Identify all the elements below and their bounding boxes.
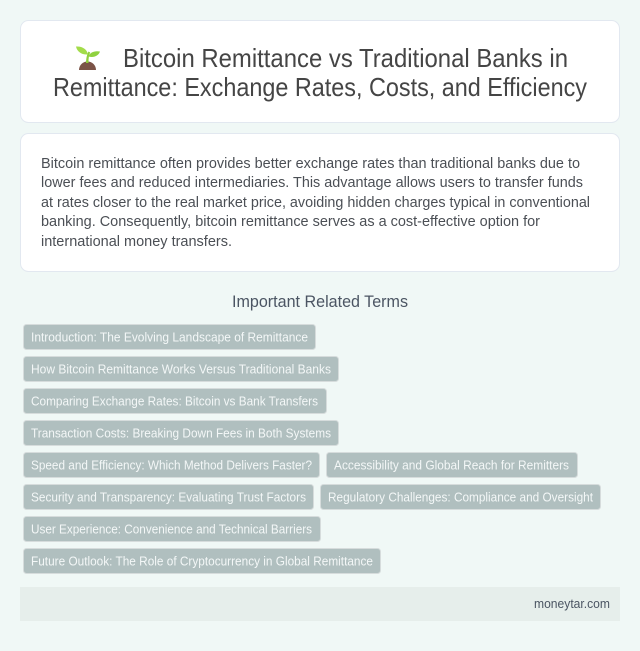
panel: summary text xyxy=(20,134,620,272)
tag: future outlook xyxy=(24,548,380,574)
tag: user experience: User Experience: Convenience and Technical Barriers xyxy=(31,522,312,536)
tag: speed and efficiency: Speed and Efficiency: Which Method Delivers Faster? xyxy=(31,458,312,472)
title line 1: Bitcoin Remittance vs Traditional Banks in xyxy=(123,43,568,73)
panel: summary text: lower fees and reduced intermediaries. This advantage allows users to transfer funds xyxy=(41,174,583,191)
tag: security xyxy=(24,484,314,510)
panel: summary text: at rates closer to the real market price, avoiding hidden charges typical in conventional xyxy=(41,194,590,211)
tag: introduction xyxy=(24,324,316,350)
footer bar xyxy=(20,587,620,621)
heading: important related terms: Important Related Terms xyxy=(232,293,408,311)
panel: summary text: international money transfers. xyxy=(41,233,232,250)
tag: regulatory xyxy=(320,484,600,510)
tag: transaction costs xyxy=(24,420,338,446)
tag: security: Security and Transparency: Evaluating Trust Factors xyxy=(31,490,306,504)
tag: how it works xyxy=(24,356,338,382)
footer bar: moneytar.com xyxy=(534,597,610,611)
tag: user experience xyxy=(24,516,320,542)
panel: summary text: banking. Consequently, bitcoin remittance serves as a cost-effective option for xyxy=(41,213,540,230)
tag: accessibility: Accessibility and Global Reach for Remitters xyxy=(334,458,569,472)
tag: exchange rates: Comparing Exchange Rates: Bitcoin vs Bank Transfers xyxy=(31,394,318,408)
icon: seedling emoji xyxy=(76,46,100,70)
title line 2: Remittance: Exchange Rates, Costs, and Efficiency xyxy=(53,72,587,102)
panel: summary text: Bitcoin remittance often provides better exchange rates than traditional banks due to xyxy=(41,155,580,172)
tag: future outlook: Future Outlook: The Role of Cryptocurrency in Global Remittance xyxy=(31,554,373,568)
tag: speed and efficiency xyxy=(24,452,320,478)
tag: introduction: Introduction: The Evolving Landscape of Remittance xyxy=(31,330,308,344)
tag: accessibility xyxy=(326,452,578,478)
tag: transaction costs: Transaction Costs: Breaking Down Fees in Both Systems xyxy=(31,426,331,440)
panel: related term tags xyxy=(24,324,600,574)
panel: title header xyxy=(20,20,620,122)
tag: regulatory: Regulatory Challenges: Compliance and Oversight xyxy=(328,490,593,504)
tag: exchange rates xyxy=(24,388,326,414)
tag: how it works: How Bitcoin Remittance Works Versus Traditional Banks xyxy=(31,362,331,376)
